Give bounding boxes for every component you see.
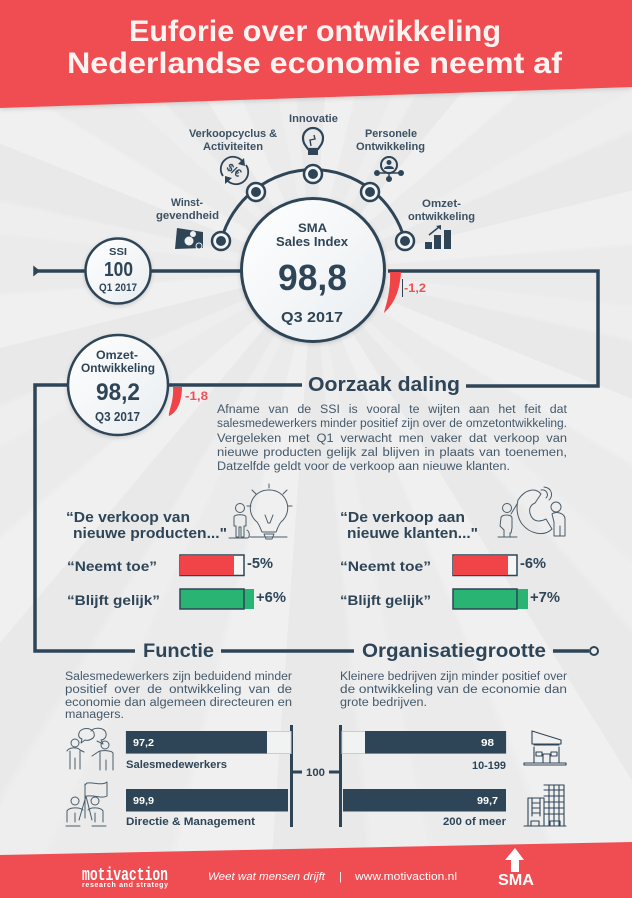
quote: nieuwe producten (66, 509, 227, 542)
driver label: Winstgevendheid: gevendheid (156, 210, 219, 222)
heading: Functie: Functie (143, 641, 214, 662)
driver label: Winstgevendheid: Winst- (171, 197, 203, 209)
SSI circle (86, 238, 150, 304)
title (67, 15, 563, 80)
delta value -1,2 (402, 279, 426, 297)
label: blijft gelijk right: “Blijft gelijk” (340, 592, 431, 608)
bar: 200 of meer value 99,7: 99,7 (477, 795, 498, 807)
bar: +6% (180, 589, 254, 609)
icon: small building (524, 731, 566, 765)
red delta wedge omzet (169, 387, 182, 416)
quote: nieuwe producten: “De verkoop van (66, 509, 190, 526)
paragraph: organisatiegrootte: Kleinere bedrijven zijn minder positief over (340, 671, 567, 683)
quote: nieuwe klanten (340, 509, 478, 542)
icon: people talking (67, 728, 113, 770)
paragraph: organisatiegrootte: de ontwikkeling van de economie dan (340, 684, 567, 696)
paragraph: oorzaak: salesmedewerkers minder positief zijn over de omzetontwikkeling. (217, 418, 567, 430)
driver label: Personele Ontwikkeling: Personele (365, 128, 417, 140)
SSI circle: 100 (104, 259, 133, 281)
paragraph: oorzaak: Afname van de SSI is vooral te wijten aan het feit dat (217, 404, 568, 416)
label: blijft gelijk: “Blijft gelijk” (67, 592, 160, 608)
value -5%: -5% (247, 556, 273, 572)
paragraph: functie: positief over de ontwikkeling van de (65, 684, 292, 696)
bar: Salesmedewerkers 97,2: 97,2 (133, 737, 154, 749)
icon: rising bar chart (425, 225, 451, 249)
paragraph: oorzaak: nieuwe producten gelijk zal blijven in plaats van toenemen, (217, 447, 567, 459)
value -6%: -6% (520, 556, 546, 572)
label: 10-199: 10-199 (472, 760, 506, 772)
paragraph: organisatiegrootte (340, 671, 567, 709)
bar: Directie en Management 99,9: 99,9 (133, 795, 154, 807)
paragraph: oorzaak: Vergeleken met Q1 verwacht men vaker dat verkoop van (217, 433, 567, 445)
paragraph: functie: managers. (65, 709, 124, 721)
icon: currency cycle: $/€ (224, 161, 243, 180)
icon: money (175, 228, 203, 249)
paragraph: functie (65, 671, 292, 721)
logo: motivaction: motivaction (82, 866, 168, 886)
icon: people with telephone (498, 487, 565, 537)
paragraph: functie: economie dan algemeen directeuren en (65, 697, 292, 709)
timeline connector lines (34, 267, 598, 655)
icon: person with large bulb (229, 484, 292, 539)
bar: -5% (180, 555, 244, 576)
tagline: Weet wat mensen drijft (208, 871, 326, 883)
red delta wedge main (384, 272, 401, 313)
value +7%: +7% (530, 590, 560, 606)
value +6%: +6% (256, 590, 286, 606)
axes with 100 reference (291, 725, 341, 827)
bar: +7% (453, 589, 528, 609)
divider: | (339, 871, 342, 883)
driver label: Personele Ontwikkeling: Ontwikkeling (356, 141, 425, 153)
icon: people network (374, 157, 404, 182)
quote: nieuwe klanten: nieuwe klanten..." (347, 525, 478, 542)
delta value -1,8: -1,8 (185, 389, 208, 403)
arc with five driver nodes (212, 165, 414, 250)
Omzet-Ontwikkeling circle: Q3 2017 (95, 410, 140, 424)
header banner (0, 0, 632, 108)
Omzet-Ontwikkeling circle (68, 335, 168, 435)
axes with 100 reference: 100 (306, 767, 325, 779)
paragraph: functie: Salesmedewerkers zijn beduidend minder (65, 671, 292, 683)
Omzet-Ontwikkeling circle: Ontwikkeling (81, 361, 155, 375)
bar: 200 of meer value 99,7 (343, 789, 506, 812)
bar: Salesmedewerkers 97,2 (126, 731, 291, 754)
icon: light bulb (303, 128, 323, 155)
heading: Oorzaak daling: Oorzaak daling (308, 374, 460, 396)
icon: tall buildings (524, 785, 566, 826)
driver label: Personele Ontwikkeling (356, 128, 425, 153)
Omzet-Ontwikkeling circle: Omzet- (96, 348, 138, 362)
label: 200 of meer: 200 of meer (443, 816, 507, 828)
logo: motivaction (82, 866, 168, 889)
driver label: Verkoopcyclus: Activiteiten (203, 141, 263, 153)
label: neemt toe right: “Neemt toe” (340, 558, 431, 574)
label: Salesmedewerkers: Salesmedewerkers (126, 759, 227, 771)
title: Nederlandse economie neemt af (67, 47, 563, 80)
label: neemt toe: “Neemt toe” (67, 558, 157, 574)
label: Directie & Management: Directie & Management (126, 816, 255, 828)
footer banner (0, 842, 632, 898)
delta value -1,2: -1,2 (404, 281, 426, 295)
logo: SMA (498, 848, 534, 889)
SMA Sales Index main circle (242, 198, 384, 342)
website: www.motivaction.nl (354, 871, 457, 883)
quote: nieuwe producten: nieuwe producten..." (73, 525, 227, 542)
paragraph: oorzaak: Datzelfde geldt voor de verkoop aan nieuwe klanten. (217, 461, 510, 473)
logo: SMA: SMA (498, 872, 534, 889)
logo: motivaction: research and strategy (82, 882, 168, 889)
driver label: Omzetontwikkeling: Omzet- (422, 198, 461, 210)
icon: currency cycle (221, 157, 248, 184)
SMA Sales Index main circle: Q3 2017 (281, 309, 343, 326)
driver label: Innovatie: Innovatie (289, 113, 338, 125)
paragraph: oorzaak (217, 404, 568, 473)
driver label: Omzetontwikkeling (408, 198, 475, 223)
heading: Organisatiegrootte: Organisatiegrootte (362, 641, 546, 662)
bar: 10-199 value 98: 98 (481, 737, 494, 749)
SMA Sales Index main circle: 98,8 (278, 257, 347, 298)
bar: 10-199 value 98 (342, 731, 506, 754)
driver label: Omzetontwikkeling: ontwikkeling (408, 211, 475, 223)
quote: nieuwe klanten: “De verkoop aan (340, 509, 465, 526)
driver label: Verkoopcyclus: Verkoopcyclus & (189, 128, 277, 140)
SMA Sales Index main circle: SMA (298, 221, 327, 235)
title: Euforie over ontwikkeling (129, 15, 501, 48)
paragraph: organisatiegrootte: grote bedrijven. (340, 697, 427, 709)
driver label: Winstgevendheid (156, 197, 219, 222)
SSI circle: SSI (109, 246, 127, 258)
driver label: Verkoopcyclus (189, 128, 277, 153)
bar: -6% (453, 555, 517, 576)
SMA Sales Index main circle: Sales Index (276, 235, 348, 249)
icon: team with flag (66, 782, 107, 826)
SSI circle: Q1 2017 (99, 282, 137, 294)
bar: Directie en Management 99,9 (126, 789, 288, 812)
Omzet-Ontwikkeling circle: 98,2 (96, 379, 140, 406)
